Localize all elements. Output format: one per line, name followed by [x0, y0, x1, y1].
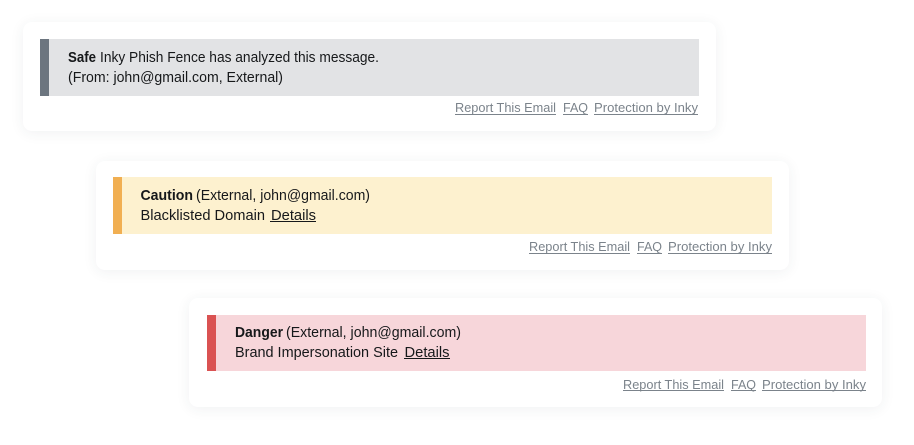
caution banner text: Blacklisted Domain: [140, 207, 265, 224]
safe banner text: Inky Phish Fence has analyzed this message.: [100, 49, 379, 66]
danger banner text: (External, john@gmail.com): [286, 324, 461, 341]
danger footer links: Protection by Inky: [762, 377, 867, 392]
safe footer links: Report This Email: [455, 100, 556, 115]
caution footer links: Protection by Inky: [668, 239, 773, 254]
safe banner text: [68, 49, 379, 86]
caution footer links: Report This Email: [529, 239, 630, 254]
danger status bar: [207, 315, 216, 371]
caution footer links: [529, 239, 773, 254]
danger banner background: [207, 315, 866, 371]
danger footer links: [623, 377, 867, 392]
caution banner text: Details: [271, 207, 316, 224]
danger banner text: Danger: [235, 324, 283, 341]
safe banner text: (From: john@gmail.com, External): [68, 69, 283, 86]
safe footer links: [455, 100, 699, 115]
danger footer links: FAQ: [731, 377, 756, 392]
safe footer links: Protection by Inky: [594, 100, 699, 115]
panel: caution notice card: [96, 161, 789, 270]
caution banner text: [140, 187, 370, 224]
danger banner text: Brand Impersonation Site: [235, 344, 398, 361]
caution banner background: [113, 177, 772, 234]
safe footer links: FAQ: [563, 100, 588, 115]
panel: danger notice card: [189, 298, 882, 407]
danger banner text: [235, 324, 461, 361]
panel: safe notice card: [23, 22, 716, 131]
danger banner text: Details: [404, 344, 450, 361]
safe banner background: [40, 39, 699, 96]
caution footer links: FAQ: [637, 239, 662, 254]
safe status bar: [40, 39, 49, 96]
danger footer links: Report This Email: [623, 377, 724, 392]
caution banner text: Caution: [140, 187, 193, 204]
caution banner text: (External, john@gmail.com): [196, 187, 370, 204]
caution status bar: [113, 177, 122, 234]
safe banner text: Safe: [68, 49, 96, 66]
